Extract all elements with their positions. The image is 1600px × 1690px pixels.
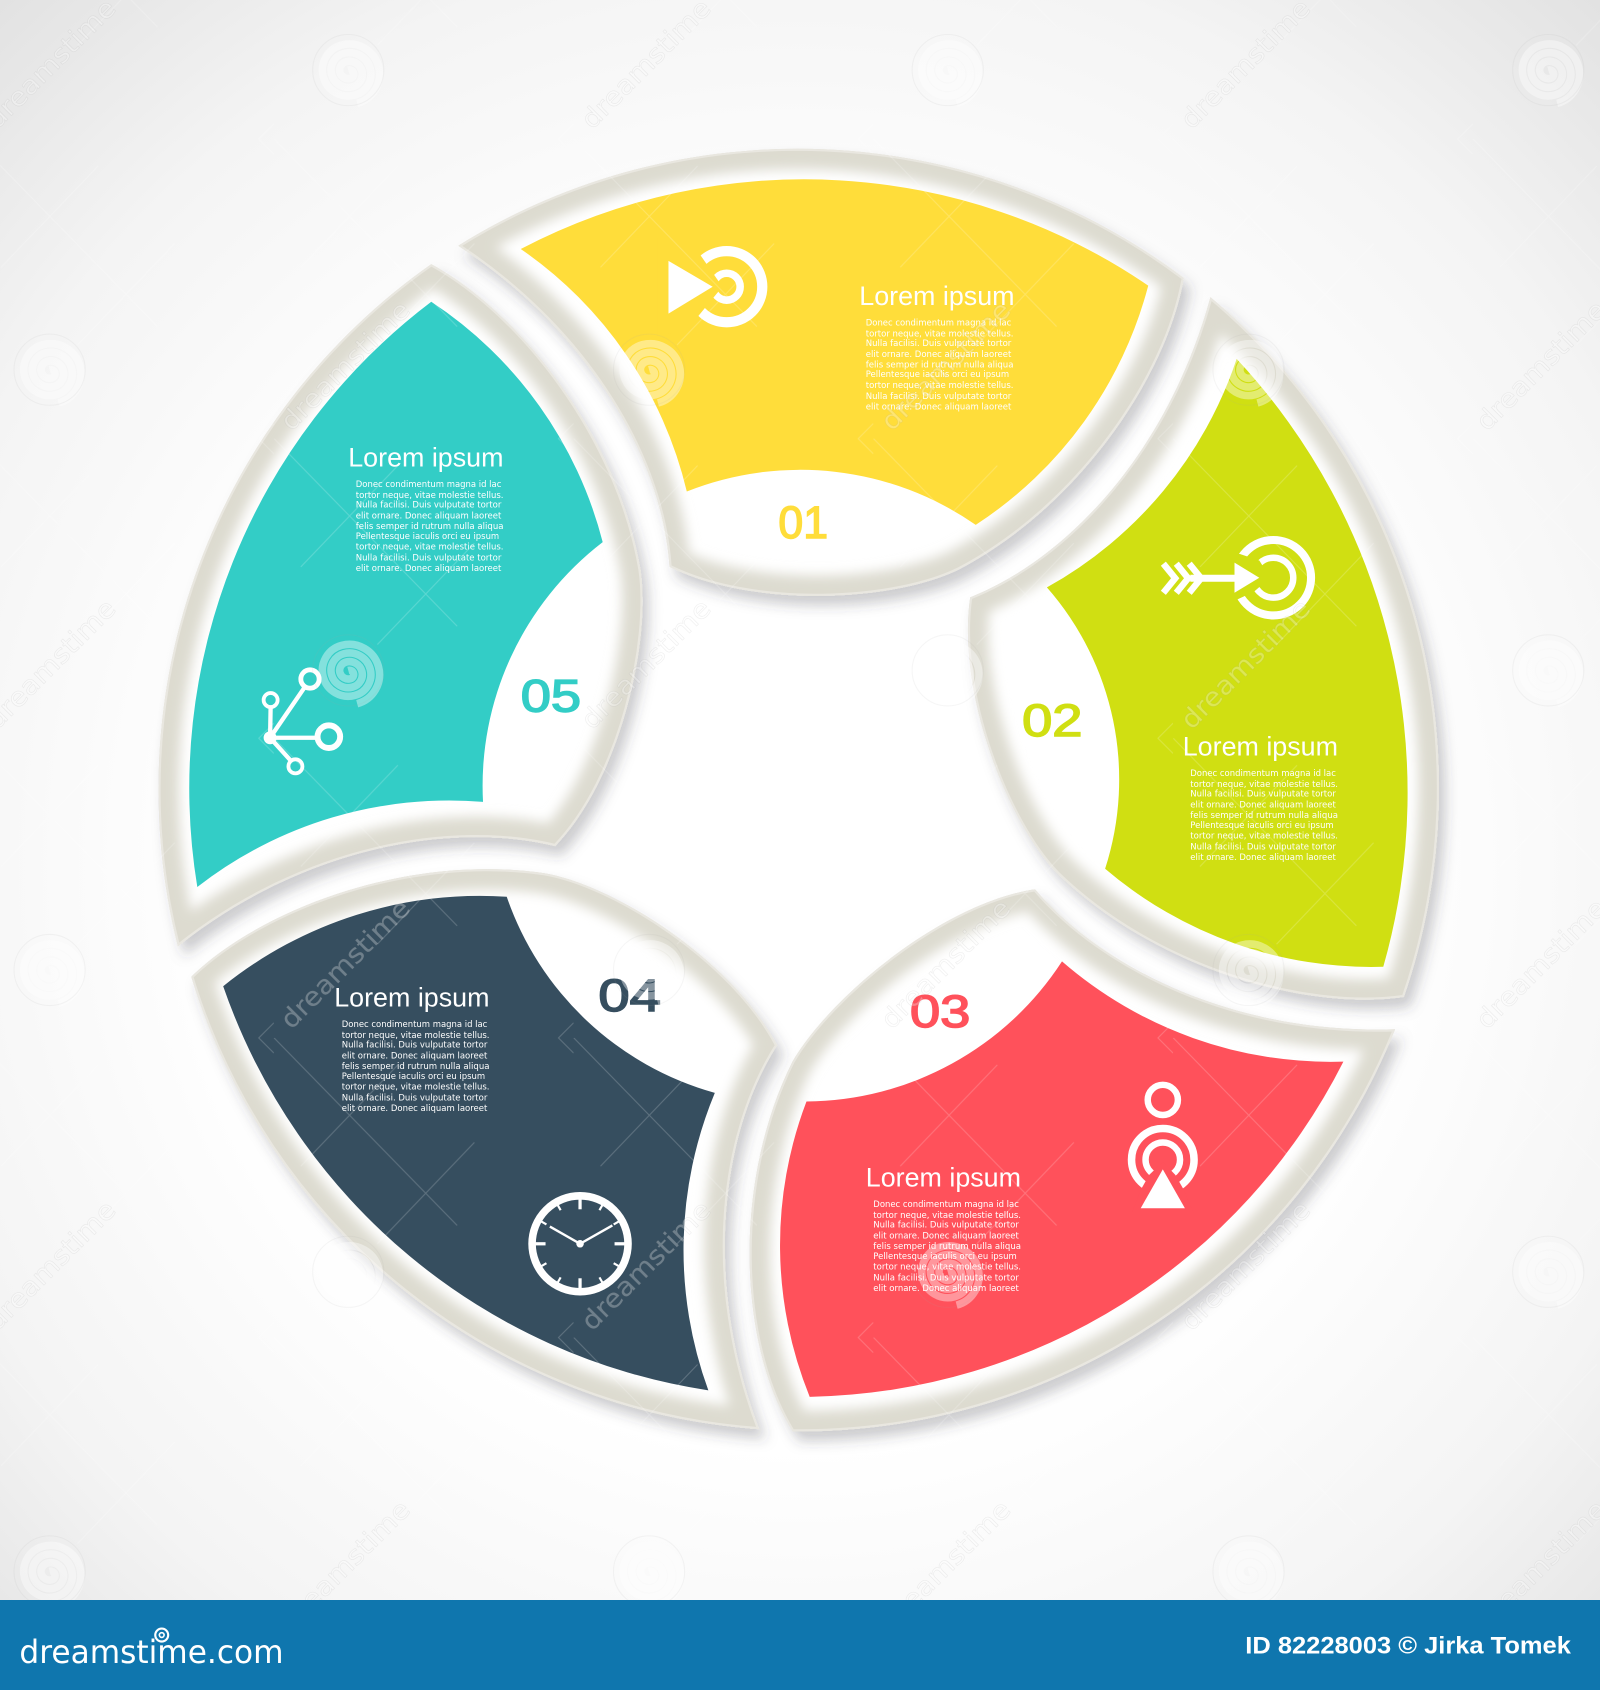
watermark text: dreamstime (876, 894, 1017, 1035)
icon: target with triangle (658, 237, 762, 336)
body text 02: Nulla facilisi. Duis vulputate tortor (1190, 842, 1336, 852)
title 05: Lorem ipsum (348, 443, 504, 473)
teal fill 05 (189, 302, 603, 887)
body text 04: elit ornare. Donec aliquam laoreet (342, 1051, 488, 1061)
number 05: 05 (521, 670, 581, 721)
icon: person target (1132, 1085, 1194, 1213)
body text 05: elit ornare. Donec aliquam laoreet (356, 564, 502, 574)
watermark text: dreamstime (576, 0, 717, 135)
body text 03: elit ornare. Donec aliquam laoreet (873, 1284, 1019, 1294)
body text 01: felis semper id rutrum nulla aliqua (866, 361, 1013, 371)
footer logo: dreamstime.com (19, 1633, 284, 1671)
body text 05 (356, 480, 504, 574)
icon: clock (532, 1196, 628, 1292)
body text 05: Nulla facilisi. Duis vulputate tortor (356, 553, 502, 563)
number 04: 04 (598, 970, 661, 1021)
body text 01: tortor neque, vitae molestie tellus. (866, 329, 1013, 339)
panel: segment 05 teal (158, 264, 643, 946)
body text 01: Pellentesque iaculis orci eu ipsum (866, 370, 1009, 380)
watermark text: dreamstime (876, 295, 1017, 437)
body text 03: Nulla facilisi. Duis vulputate tortor (873, 1273, 1019, 1283)
body text 01: Nulla facilisi. Duis vulputate tortor (866, 392, 1012, 402)
panel: segment 01 yellow (458, 149, 1184, 596)
watermark text: dreamstime (1175, 0, 1317, 135)
number 03: 03 (910, 986, 970, 1037)
body text 02: tortor neque, vitae molestie tellus. (1190, 832, 1338, 842)
red fill 03 (780, 961, 1343, 1397)
body text 02: Pellentesque iaculis orci eu ipsum (1190, 821, 1334, 831)
body text 02: Donec condimentum magna id lac (1190, 769, 1336, 779)
body text 02: elit ornare. Donec aliquam laoreet (1190, 800, 1336, 810)
footer credit: ID 82228003 © Jirka Tomek (1245, 1633, 1572, 1659)
watermark text: dreamstime (1175, 1195, 1317, 1337)
body text 01: Nulla facilisi. Duis vulputate tortor (866, 339, 1012, 349)
body text 05: tortor neque, vitae molestie tellus. (356, 543, 504, 553)
title 02: Lorem ipsum (1183, 732, 1338, 762)
watermark text: dreamstime (275, 295, 417, 437)
body text 04 (342, 1020, 489, 1114)
yellow fill 01 (521, 179, 1148, 525)
body text 05: Donec condimentum magna id lac (356, 480, 502, 490)
number 02: 02 (1022, 695, 1082, 746)
body text 03: Donec condimentum magna id lac (873, 1200, 1019, 1210)
body text 05: felis semper id rutrum nulla aliqua (356, 522, 504, 532)
segment frame 04 (191, 869, 788, 1445)
watermark text: dreamstime (275, 894, 417, 1035)
green fill 02 (1047, 359, 1408, 967)
icon: network nodes (264, 670, 340, 773)
body text 04: Nulla facilisi. Duis vulputate tortor (342, 1093, 488, 1103)
footer bar (0, 1600, 1600, 1690)
body text 01: tortor neque, vitae molestie tellus. (866, 381, 1013, 391)
icon: arrow and target (1163, 540, 1311, 615)
body text 03 (873, 1200, 1021, 1294)
body text 05: tortor neque, vitae molestie tellus. (356, 491, 504, 501)
body text 03: felis semper id rutrum nulla aliqua (873, 1242, 1021, 1252)
number 01: 01 (778, 497, 828, 548)
panel: segment 03 red (750, 889, 1395, 1431)
body text 04: Pellentesque iaculis orci eu ipsum (342, 1072, 485, 1082)
watermark text: dreamstime (876, 1495, 1017, 1637)
watermark text: dreamstime (576, 1195, 717, 1337)
body text 04: elit ornare. Donec aliquam laoreet (342, 1104, 488, 1114)
body text 02: Nulla facilisi. Duis vulputate tortor (1190, 789, 1336, 799)
panel: segment 04 navy (191, 869, 788, 1445)
body text 03: Nulla facilisi. Duis vulputate tortor (873, 1221, 1019, 1231)
body text 02: tortor neque, vitae molestie tellus. (1190, 780, 1338, 790)
body text 01 (866, 318, 1013, 413)
segment frame 03 (750, 889, 1395, 1431)
body text 02: felis semper id rutrum nulla aliqua (1190, 811, 1338, 821)
body text 03: tortor neque, vitae molestie tellus. (873, 1211, 1021, 1221)
body text 01: elit ornare. Donec aliquam laoreet (866, 350, 1012, 360)
body text 01: elit ornare. Donec aliquam laoreet (866, 403, 1012, 413)
body text 03: elit ornare. Donec aliquam laoreet (873, 1231, 1019, 1241)
body text 05: Pellentesque iaculis orci eu ipsum (356, 532, 499, 542)
body text 03: tortor neque, vitae molestie tellus. (873, 1263, 1021, 1273)
segment frame 01 (458, 149, 1184, 596)
watermark text: dreamstime (576, 594, 717, 736)
panel: segment 02 green (968, 297, 1452, 1016)
segment frame 02 (968, 297, 1452, 1016)
watermark text: dreamstime (1175, 594, 1317, 736)
title 01: Lorem ipsum (859, 281, 1015, 311)
body text 04: tortor neque, vitae molestie tellus. (342, 1083, 489, 1093)
body text 03: Pellentesque iaculis orci eu ipsum (873, 1252, 1017, 1262)
watermark text: dreamstime (1471, 1495, 1600, 1637)
watermark text: dreamstime (1471, 894, 1600, 1035)
title 04: Lorem ipsum (334, 983, 489, 1013)
body text 04: tortor neque, vitae molestie tellus. (342, 1031, 489, 1041)
title 03: Lorem ipsum (866, 1163, 1021, 1193)
body text 02 (1190, 769, 1338, 863)
watermark text: dreamstime (275, 1495, 417, 1637)
body text 04: Nulla facilisi. Duis vulputate tortor (342, 1041, 488, 1051)
body text 05: Nulla facilisi. Duis vulputate tortor (356, 501, 502, 511)
body text 04: felis semper id rutrum nulla aliqua (342, 1062, 489, 1072)
watermark text: dreamstime (1471, 295, 1600, 437)
body text 01: Donec condimentum magna id lac (866, 318, 1012, 328)
body text 05: elit ornare. Donec aliquam laoreet (356, 511, 502, 521)
body text 02: elit ornare. Donec aliquam laoreet (1190, 853, 1336, 863)
navy fill 04 (223, 896, 715, 1390)
segment frame 05 (158, 264, 643, 946)
body text 04: Donec condimentum magna id lac (342, 1020, 488, 1030)
